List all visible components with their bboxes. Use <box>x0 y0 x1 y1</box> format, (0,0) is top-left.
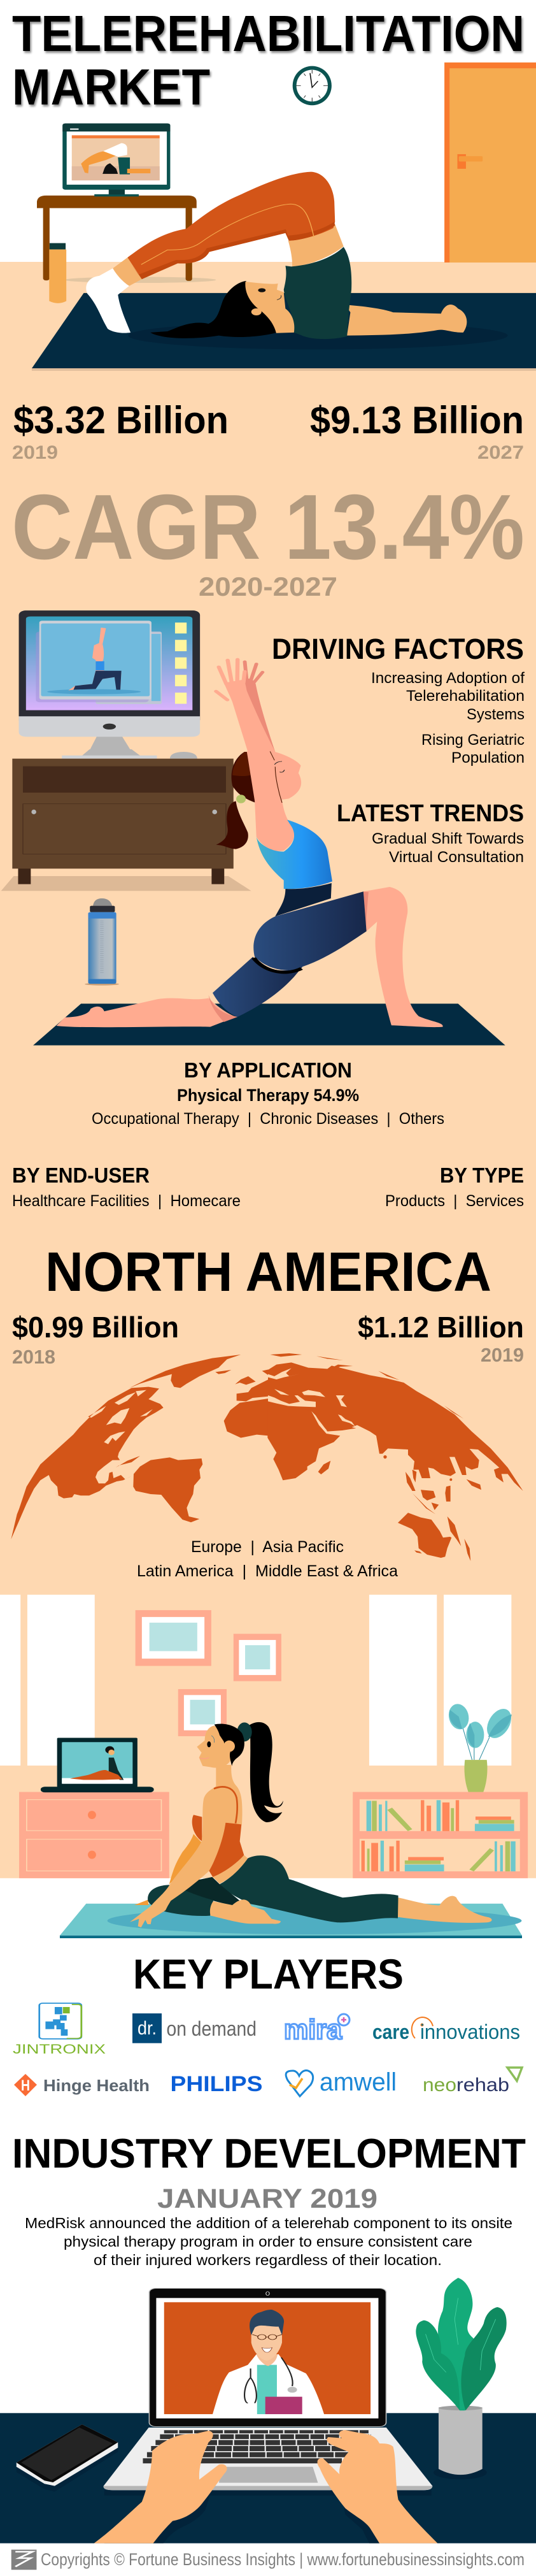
wall clock <box>293 66 332 105</box>
text: driving factors: Population <box>451 749 525 766</box>
logo: care innovations: innovations <box>420 2020 520 2043</box>
logo: neorehab <box>423 2068 522 2096</box>
logo: care innovations <box>372 2017 520 2043</box>
hands on keyboard <box>94 2430 437 2544</box>
scrunchie <box>237 1722 252 1741</box>
logo: dr on demand <box>132 2013 257 2043</box>
leggings <box>148 1855 398 1922</box>
yoga mat <box>33 1004 505 1046</box>
text: driving factors: DRIVING FACTORS <box>272 633 524 665</box>
illustration: living room pigeon pose <box>0 1595 536 1937</box>
desk <box>0 2413 536 2544</box>
text: by application: Physical Therapy 54.9% <box>177 1086 359 1105</box>
stat: 2027 market value: 2027 <box>477 442 524 463</box>
stat: north america 2019: $1.12 Billion <box>358 1311 524 1344</box>
text: driving factors: Telerehabilitation <box>406 687 525 705</box>
text: development description <box>25 2215 512 2268</box>
midriff <box>209 1855 248 1884</box>
blue water bottle <box>85 898 119 986</box>
drawer unit <box>19 1792 169 1878</box>
text: latest trends <box>337 800 524 866</box>
logo: Hinge Health: H <box>21 2077 30 2094</box>
stat: north america 2019: 2019 <box>481 1344 524 1366</box>
background: peach page band <box>0 262 536 1878</box>
computer monitor with yoga video <box>62 124 170 196</box>
water bottle <box>49 243 66 303</box>
windows <box>0 1595 511 1766</box>
text: driving factors: Rising Geriatric <box>421 731 525 749</box>
cabinet <box>1 759 251 891</box>
logo: amwell <box>286 2068 397 2096</box>
laptop base and keyboard <box>104 2428 432 2496</box>
stat: north america 2018: $0.99 Billion <box>12 1311 179 1344</box>
floor <box>0 1878 536 1937</box>
logo: Jintronix: JINTRONIX <box>13 2042 106 2057</box>
text: latest trends: LATEST TRENDS <box>337 800 524 827</box>
logo: care innovations: care <box>372 2020 409 2043</box>
logo: Hinge Health <box>14 2074 150 2096</box>
text: driving factors: Systems <box>467 706 525 723</box>
doctor <box>213 2310 324 2414</box>
text: latest trends: Gradual Shift Towards <box>372 830 524 847</box>
text: driving factors: Increasing Adoption of <box>371 670 525 687</box>
date: january 2019: JANUARY 2019 <box>157 2184 377 2214</box>
heading: industry development: INDUSTRY DEVELOPMENT <box>12 2130 526 2177</box>
picture frames <box>136 1610 281 1736</box>
heading: key players: KEY PLAYERS <box>133 1950 404 1997</box>
yoga mat <box>32 293 536 371</box>
text: other regions: Latin America | Middle East & Africa <box>137 1562 398 1580</box>
door <box>444 62 536 263</box>
smartphone <box>17 2424 118 2492</box>
arm <box>130 1790 237 1927</box>
computer stand on cabinet <box>62 749 197 759</box>
text: other regions <box>137 1538 398 1580</box>
region heading: north america: NORTH AMERICA <box>45 1241 491 1303</box>
logo: Jintronix <box>13 2003 106 2057</box>
stat: north america 2018: 2018 <box>12 1346 55 1368</box>
laptop screen with doctor <box>149 2288 386 2427</box>
tank top <box>169 1815 244 1885</box>
stat: CAGR: 2020-2027 <box>199 572 337 601</box>
logo: dr on demand: on demand <box>167 2017 257 2040</box>
text: driving factors <box>272 633 525 766</box>
yoga mat <box>60 1904 522 1937</box>
extended lower leg and foot <box>397 1896 492 1923</box>
orange toes <box>134 1900 148 1905</box>
text: by type <box>385 1163 524 1210</box>
illustration: cabinet, bottle, lunge pose <box>1 749 505 1046</box>
woman in plow pose <box>86 172 467 339</box>
ponytail <box>249 1722 283 1822</box>
illustration: telehealth desk scene <box>0 2278 536 2570</box>
logo: Philips: PHILIPS <box>171 2072 262 2096</box>
text: development description: physical therapy program in order to ensure consistent care <box>64 2233 472 2250</box>
world map <box>11 1353 523 1561</box>
title: MARKET <box>12 59 210 115</box>
logo: dr on demand: dr. <box>138 2018 157 2039</box>
woman in pigeon pose <box>130 1722 398 1927</box>
plant pot and leaves <box>416 2278 507 2479</box>
text: by application: Occupational Therapy | Chronic Diseases | Others <box>92 1110 444 1128</box>
folded foot <box>210 1899 281 1924</box>
stat: 2027 market value: $9.13 Billion <box>310 399 524 442</box>
map: Africa, Asia, Australia <box>267 1353 523 1561</box>
text: latest trends: Virtual Consultation <box>389 849 524 866</box>
potted plant <box>448 1703 516 1792</box>
text: by type: Products | Services <box>385 1192 524 1210</box>
stat: 2019 market value: $3.32 Billion <box>13 399 229 442</box>
stat: 2019 market value: 2019 <box>12 442 58 463</box>
table <box>37 196 216 283</box>
raised hands <box>216 659 275 752</box>
logo: Hinge Health: Hinge Health <box>43 2076 150 2095</box>
text: by application <box>92 1058 444 1128</box>
stat: north america 2019 <box>358 1311 524 1366</box>
ear and facial details <box>199 1736 235 1759</box>
illustration: desktop computer <box>19 610 275 752</box>
text: development description: MedRisk announced the addition of a telerehab component to its onsite <box>25 2215 512 2231</box>
text: by end-user <box>12 1163 241 1210</box>
map: Americas, Greenland, western Europe <box>11 1355 269 1539</box>
illustration: plow pose room scene <box>32 62 536 371</box>
neck and back <box>204 1765 243 1824</box>
logo: neorehab: rehab <box>456 2075 509 2096</box>
text: other regions: Europe | Asia Pacific <box>191 1538 344 1556</box>
mat bottom edge <box>60 1937 522 1938</box>
bookshelf <box>353 1792 528 1878</box>
hair <box>215 1723 244 1766</box>
logo: mira: mira <box>284 2014 342 2045</box>
logo: amwell: amwell <box>320 2068 397 2096</box>
stat: 2027 market value <box>310 399 524 463</box>
text: by end-user: BY END-USER <box>12 1163 150 1187</box>
text: by application: BY APPLICATION <box>184 1058 352 1082</box>
logo: neorehab: neo <box>423 2075 456 2096</box>
stat: 2019 market value <box>12 399 229 463</box>
face <box>197 1725 232 1767</box>
shoulder strap <box>214 1787 237 1824</box>
text: by end-user: Healthcare Facilities | Homecare <box>12 1192 241 1210</box>
title <box>12 5 525 115</box>
stat: north america 2018 <box>12 1311 179 1368</box>
laptop with yoga video <box>41 1738 154 1792</box>
text: by type: BY TYPE <box>440 1163 524 1187</box>
woman in lunge pose <box>57 751 443 1027</box>
text: development description: of their injured workers regardless of their location. <box>94 2252 442 2268</box>
footer logo <box>11 2550 36 2570</box>
